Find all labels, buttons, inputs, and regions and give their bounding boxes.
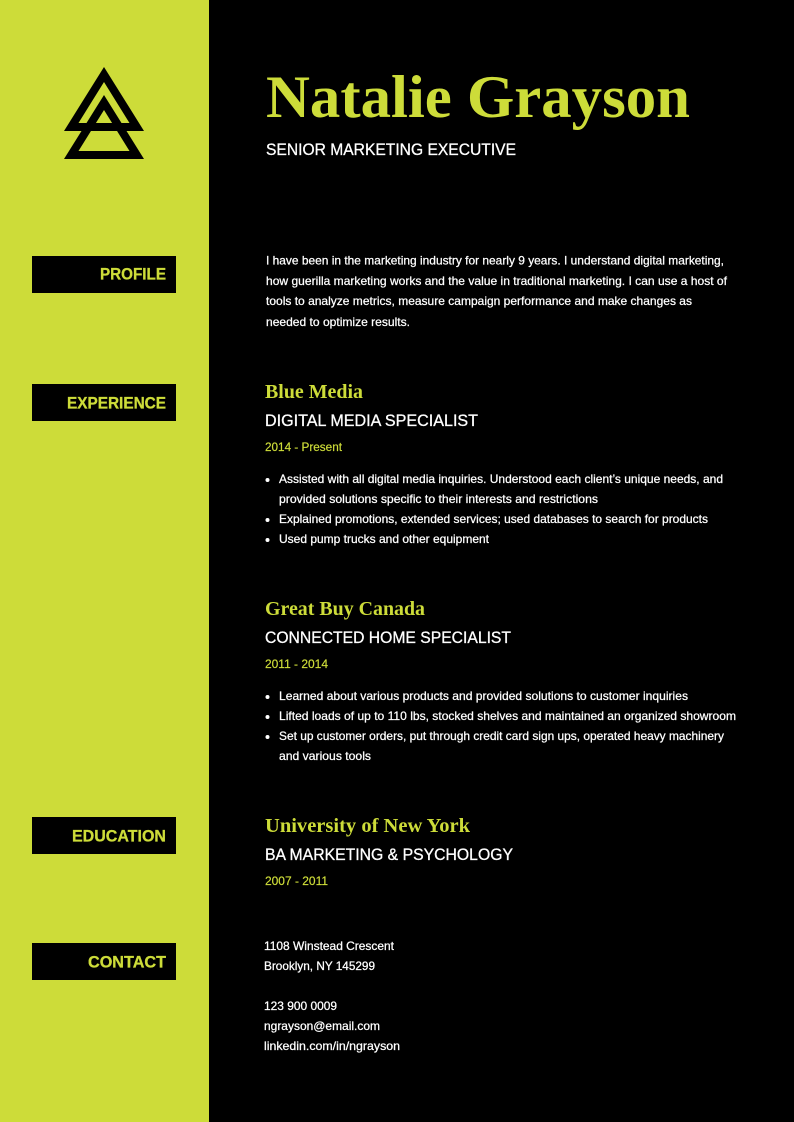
job: Blue Media: 2014 - Present	[265, 440, 343, 454]
job: Great Buy Canada: Learned about various products and provided solutions to customer inquiries	[279, 689, 688, 703]
label: education	[32, 817, 176, 854]
label: contact: CONTACT	[88, 954, 166, 972]
job: Great Buy Canada	[265, 598, 736, 763]
text block: profile: how guerilla marketing works and the value in traditional marketing. I can use a host of	[266, 274, 728, 288]
text block: profile	[266, 254, 728, 329]
education entry	[265, 815, 513, 888]
education entry: BA MARKETING & PSYCHOLOGY	[265, 845, 513, 864]
label: contact	[32, 943, 176, 980]
job: Great Buy Canada: 2011 - 2014	[265, 657, 328, 671]
job: Great Buy Canada: and various tools	[279, 749, 371, 763]
contact details: 1108 Winstead Crescent	[264, 939, 395, 953]
contact details: linkedin.com/in/ngrayson	[264, 1039, 400, 1053]
text block: profile: I have been in the marketing industry for nearly 9 years. I understand digital marketing,	[266, 254, 724, 268]
job: Blue Media	[265, 381, 723, 546]
sidebar panel	[0, 0, 209, 1122]
label: education: EDUCATION	[72, 828, 166, 846]
subtitle: job title: SENIOR MARKETING EXECUTIVE	[266, 140, 516, 159]
job: Blue Media: provided solutions specific to their interests and restrictions	[279, 492, 598, 506]
job: Great Buy Canada: Lifted loads of up to 110 lbs, stocked shelves and maintained an organized showroom	[279, 709, 736, 723]
job: Blue Media: Assisted with all digital media inquiries. Understood each client’s unique needs, and	[279, 472, 723, 486]
label: profile	[32, 256, 176, 293]
job: Great Buy Canada: Great Buy Canada	[265, 598, 425, 620]
job: Great Buy Canada: CONNECTED HOME SPECIALIST	[265, 628, 511, 647]
icon: triangle logo	[64, 67, 144, 159]
job: Blue Media: Explained promotions, extended services; used databases to search for products	[279, 512, 708, 526]
label: profile: PROFILE	[100, 266, 166, 284]
job: Blue Media: Blue Media	[265, 381, 363, 403]
contact details: ngrayson@email.com	[264, 1019, 380, 1033]
job: Blue Media: Used pump trucks and other equipment	[279, 532, 490, 546]
education entry: University of New York	[265, 815, 471, 837]
job: Blue Media: DIGITAL MEDIA SPECIALIST	[265, 411, 478, 430]
label: experience: EXPERIENCE	[67, 394, 166, 412]
education entry: 2007 - 2011	[265, 874, 328, 888]
job: Great Buy Canada: Set up customer orders, put through credit card sign ups, operated heavy machinery	[279, 729, 724, 743]
text block: profile: tools to analyze metrics, measure campaign performance and make changes as	[266, 294, 692, 308]
title: name: Natalie Grayson	[266, 64, 690, 130]
text block: profile: needed to optimize results.	[266, 315, 410, 329]
label: experience	[32, 384, 176, 421]
contact details: Brooklyn, NY 145299	[264, 959, 375, 973]
contact details	[264, 939, 400, 1053]
contact details: 123 900 0009	[264, 999, 337, 1013]
